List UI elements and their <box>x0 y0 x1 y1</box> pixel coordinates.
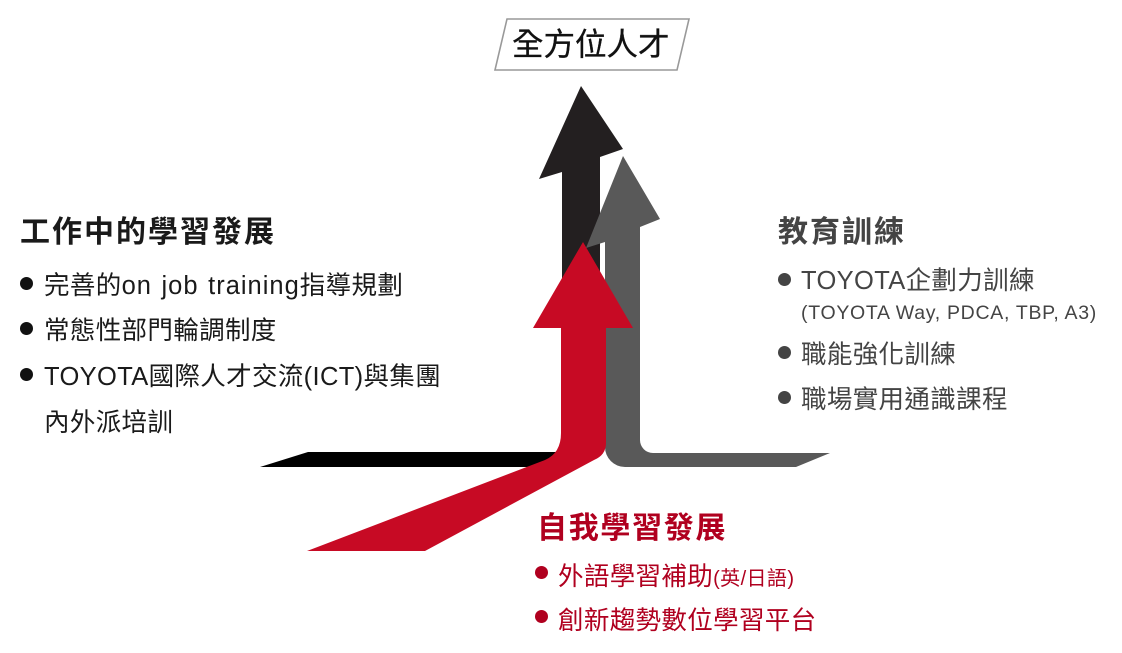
list item 1: 完善的on job training指導規劃 <box>44 272 403 300</box>
list item 1: TOYOTA企劃力訓練 <box>801 267 1035 295</box>
list item 3: 職場實用通識課程 <box>801 386 1008 414</box>
red arrow <box>307 242 633 551</box>
gray arrow <box>586 156 830 467</box>
list item 1: 外語學習補助(英/日語) <box>558 563 794 591</box>
list item 1: (TOYOTA Way, PDCA, TBP, A3) <box>801 302 1097 324</box>
panel: self-directed learning <box>535 512 817 635</box>
heading: training: 教育訓練 <box>778 216 906 249</box>
panel: on-the-job learning <box>20 216 441 437</box>
heading: self-directed learning: 自我學習發展 <box>537 512 727 545</box>
panel: training <box>778 216 1097 414</box>
list item 2: 創新趨勢數位學習平台 <box>558 607 817 635</box>
list item 3: TOYOTA國際人才交流(ICT)與集團 <box>44 363 441 391</box>
heading: on-the-job learning: 工作中的學習發展 <box>20 216 276 249</box>
list item 1 <box>778 267 1097 324</box>
list item 2: 常態性部門輪調制度 <box>44 317 277 345</box>
list item 2: 職能強化訓練 <box>801 341 956 369</box>
black arrow <box>260 86 623 467</box>
text: 全方位人才 <box>512 26 670 62</box>
list item 3: 內外派培訓 <box>44 409 173 437</box>
list item 3 <box>20 363 441 437</box>
title badge <box>494 18 690 71</box>
